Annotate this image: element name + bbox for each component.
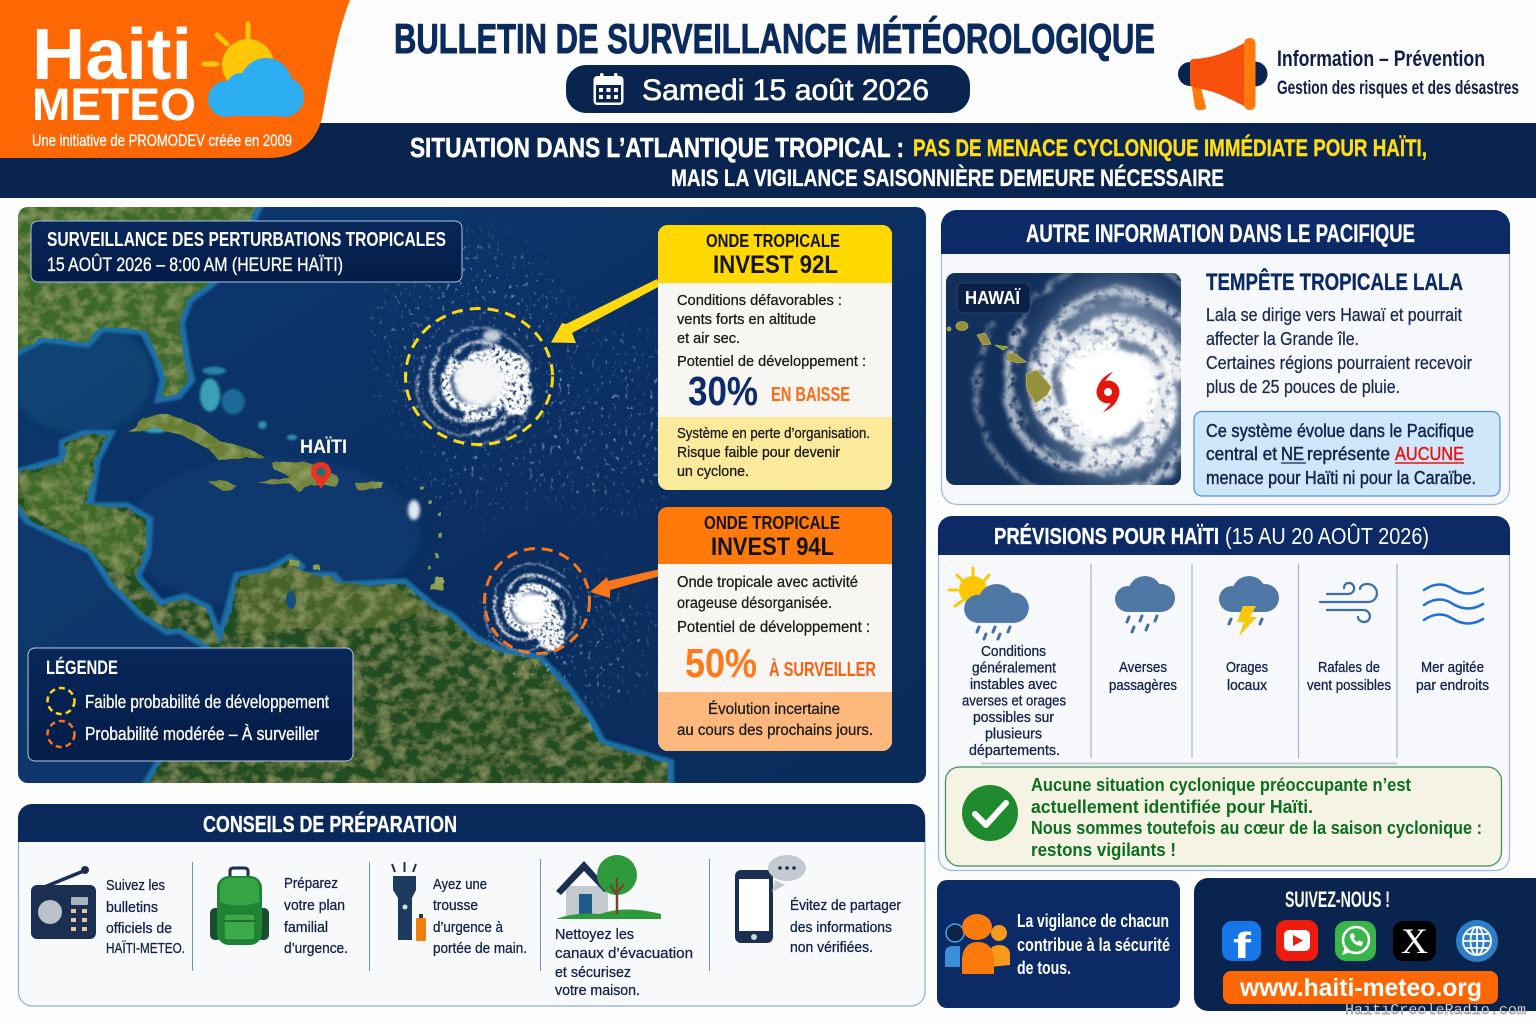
tip: bulletins officiels: HAÏTI-METEO. xyxy=(106,940,185,957)
panel: Invest 92L card: 30% xyxy=(688,368,758,414)
callout: aucune situation préoccupante: Aucune situation cyclonique préoccupante n’est xyxy=(1031,775,1411,795)
date pill: Samedi 15 août 2026 xyxy=(642,74,929,107)
item: conditions générales: généralement xyxy=(972,660,1056,676)
label: Haïti: HAÏTI xyxy=(300,437,347,458)
callout: aucune menace: représente xyxy=(1307,444,1390,464)
logo: Haiti Meteo xyxy=(0,0,350,158)
item: mer agitée xyxy=(1416,660,1489,694)
callout: aucune menace: central et xyxy=(1206,444,1277,464)
icon: sun, cloud and rain xyxy=(949,568,1029,639)
tip: bulletins officiels xyxy=(106,877,185,957)
panel: Invest 92L card: un cyclone. xyxy=(677,464,749,480)
panel: vigilance xyxy=(937,880,1180,1008)
callout: aucune menace: Ce système évolue dans le Pacifique xyxy=(1206,421,1474,441)
icon: X: X xyxy=(1401,921,1428,961)
tip: trousse d'urgence: d’urgence à xyxy=(433,919,504,936)
icon: house and tree xyxy=(556,855,661,919)
tip: plan familial: Préparez xyxy=(284,875,338,892)
title: BULLETIN DE SURVEILLANCE MÉTÉOROLOGIQUE xyxy=(394,15,1155,62)
icon: rain cloud xyxy=(1115,576,1175,632)
icon: YouTube xyxy=(1276,920,1318,961)
panel: Invest 92L card: Système en perte d’organisation. xyxy=(677,426,870,442)
item: averses: passagères xyxy=(1109,678,1177,694)
icon: people xyxy=(945,914,1010,974)
item: orages xyxy=(1226,660,1268,694)
panel: Invest 92L card xyxy=(658,225,892,490)
logo: Haiti Meteo: METEO xyxy=(32,79,196,130)
panel: Invest 92L card: Potentiel de développement : xyxy=(677,353,866,370)
situation headline xyxy=(410,132,1427,192)
label: Hawaï: HAWAÏ xyxy=(965,288,1021,308)
callout: aucune menace: NE xyxy=(1281,444,1304,464)
icon: storm Invest 94L clouds xyxy=(482,562,578,657)
text: description: affecter la Grande île. xyxy=(1206,329,1359,349)
tip: canaux d'évacuation: Nettoyez les xyxy=(555,926,634,943)
tip: bulletins officiels: bulletins xyxy=(106,899,158,916)
callout: aucune menace: menace pour Haïti ni pour la Caraïbe. xyxy=(1206,468,1476,488)
icon: check mark xyxy=(962,785,1018,841)
callout: aucune situation préoccupante: actuellement identifiée pour Haïti. xyxy=(1031,797,1313,817)
tip: plan familial: d’urgence. xyxy=(284,940,348,957)
icon: sun and cloud xyxy=(204,24,304,117)
tip: informations non vérifiées: Évitez de partager xyxy=(790,897,901,914)
panel: Pacifique: AUTRE INFORMATION DANS LE PACIFIQUE xyxy=(1026,220,1415,248)
panel: Invest 92L card: EN BAISSE xyxy=(771,384,850,406)
tip: plan familial: votre plan xyxy=(284,897,345,914)
panel: suivez-nous: SUIVEZ-NOUS ! xyxy=(1285,887,1390,912)
tip: canaux d'évacuation: et sécurisez xyxy=(555,964,631,981)
map: cloud speckles xyxy=(370,220,700,710)
map: coastal glow xyxy=(13,203,668,787)
panel: Invest 94L card: Évolution incertaine xyxy=(708,699,840,718)
callout: aucune situation préoccupante xyxy=(946,767,1502,866)
panel: vigilance: La vigilance de chacun xyxy=(1017,911,1169,931)
item: conditions générales: instables avec xyxy=(970,677,1057,693)
callout: aucune menace xyxy=(1194,412,1500,496)
panel: Invest 92L card: ONDE TROPICALE xyxy=(706,230,840,251)
icon: Facebook xyxy=(1222,921,1261,966)
panel: Invest 92L card: vents forts en altitude xyxy=(677,311,816,328)
panel: Invest 94L card xyxy=(658,507,892,751)
panel: Invest 94L card: Onde tropicale avec activité xyxy=(677,574,858,591)
icon: backpack xyxy=(210,868,269,945)
situation headline: MAIS LA VIGILANCE SAISONNIÈRE DEMEURE NÉCESSAIRE xyxy=(671,164,1224,192)
item: rafales: vent possibles xyxy=(1307,678,1391,694)
satellite image: Hawaï xyxy=(946,273,1181,485)
icon: thunderstorm xyxy=(1219,576,1279,636)
icon: wind xyxy=(1320,583,1377,622)
tip: plan familial: familial xyxy=(284,919,328,936)
watermark: HaitiCreoleRadio.com xyxy=(1345,1002,1526,1019)
item: averses: Averses xyxy=(1119,660,1167,676)
text: description: plus de 25 pouces de pluie. xyxy=(1206,377,1400,397)
item: averses xyxy=(1109,660,1177,694)
panel: vigilance: contribue à la sécurité xyxy=(1017,935,1170,955)
icon: flashlight xyxy=(392,862,426,941)
date pill xyxy=(566,65,970,113)
icon: globe xyxy=(1456,920,1498,962)
header tagline xyxy=(1277,46,1519,99)
panel: Invest 92L card: et air sec. xyxy=(677,330,740,347)
map: small cloud xyxy=(408,500,420,520)
circle: low probability xyxy=(406,308,552,444)
panel: Pacifique xyxy=(933,210,1510,539)
item: mer agitée: par endroits xyxy=(1416,678,1489,694)
circle: moderate probability xyxy=(484,548,590,654)
tip: canaux d'évacuation: votre maison. xyxy=(555,982,640,999)
panel: conseils de préparation: CONSEILS DE PRÉPARATION xyxy=(203,810,457,837)
callout: aucune situation préoccupante: Nous sommes toutefois au cœur de la saison cyclonique : xyxy=(1031,818,1482,838)
panel: map title box: SURVEILLANCE DES PERTURBATIONS TROPICALES xyxy=(47,229,446,251)
panel: Invest 94L card: INVEST 94L xyxy=(711,533,834,561)
text: description xyxy=(1206,305,1472,397)
icon: X xyxy=(1393,921,1436,961)
panel: prévisions: (15 AU 20 AOÛT 2026) xyxy=(1225,522,1429,549)
panel: satellite map xyxy=(8,203,926,787)
item: conditions générales: Conditions xyxy=(981,644,1046,660)
panel: legend: Faible probabilité de développement xyxy=(85,692,329,712)
item: mer agitée: Mer agitée xyxy=(1421,660,1484,676)
item: conditions générales: possibles sur xyxy=(973,710,1054,726)
map: land masses xyxy=(13,203,668,787)
logo: Haiti Meteo: Une initiative de PROMODEV créée en 2009 xyxy=(32,131,292,150)
tip: informations non vérifiées: non vérifiées. xyxy=(790,939,873,956)
callout: aucune menace: AUCUNE xyxy=(1395,444,1464,464)
item: conditions générales: départements. xyxy=(969,743,1060,759)
tip: trousse d'urgence: trousse xyxy=(433,897,478,914)
panel: legend: LÉGENDE xyxy=(46,657,118,679)
panel: Invest 94L card: À SURVEILLER xyxy=(769,658,876,681)
panel: vigilance: de tous. xyxy=(1017,958,1071,978)
panel: Invest 92L card: Conditions défavorables : xyxy=(677,292,842,309)
item: rafales xyxy=(1307,660,1391,694)
tip: plan familial xyxy=(284,875,348,957)
item: conditions générales xyxy=(962,644,1066,759)
panel: map title box: 15 AOÛT 2026 – 8:00 AM (HEURE HAÏTI) xyxy=(47,254,343,276)
icon: calendar xyxy=(594,73,624,105)
panel: Pacifique: TEMPÊTE TROPICALE LALA xyxy=(1206,268,1463,296)
panel: map title box xyxy=(31,221,462,282)
icon: storm Invest 92L clouds xyxy=(414,325,534,448)
map: lake Maracaibo xyxy=(286,591,296,609)
tip: bulletins officiels: officiels de xyxy=(106,920,172,937)
arrow: to Invest 92L xyxy=(551,279,660,343)
label: Hawaï xyxy=(957,283,1030,313)
panel: legend xyxy=(28,648,353,761)
icon: phone and speech bubble xyxy=(735,855,806,943)
icon: megaphone xyxy=(1178,38,1268,110)
tip: canaux d'évacuation: canaux d’évacuation xyxy=(555,945,693,962)
panel: Invest 94L card: Potentiel de développement : xyxy=(677,619,870,636)
tip: trousse d'urgence: Ayez une xyxy=(433,876,487,893)
item: conditions générales: averses et orages xyxy=(962,694,1066,710)
icon: WhatsApp xyxy=(1335,921,1376,961)
panel: prévisions: PRÉVISIONS POUR HAÏTI xyxy=(994,522,1219,549)
icon: Facebook: f xyxy=(1233,925,1252,966)
map: ocean shelves xyxy=(8,320,420,787)
header band xyxy=(0,123,1536,198)
icon: location pin xyxy=(311,462,331,489)
panel: Invest 92L card: INVEST 92L xyxy=(713,251,838,279)
icon: radio xyxy=(31,866,96,939)
callout: aucune situation préoccupante: restons vigilants ! xyxy=(1031,840,1176,860)
panel: conseils de préparation xyxy=(18,804,925,1006)
situation headline: SITUATION DANS L’ATLANTIQUE TROPICAL : xyxy=(410,132,904,163)
icon: waves xyxy=(1424,585,1483,624)
panel: Invest 94L card: orageuse désorganisée. xyxy=(677,595,832,612)
item: orages: Orages xyxy=(1226,660,1268,676)
tip: informations non vérifiées: des informations xyxy=(790,919,892,936)
panel: Invest 92L card: Risque faible pour devenir xyxy=(677,445,840,461)
panel: suivez-nous xyxy=(1194,878,1536,1011)
website button: www.haiti-meteo.org xyxy=(1239,974,1482,1002)
item: conditions générales: plusieurs xyxy=(985,726,1042,742)
icon: hurricane symbol xyxy=(1096,372,1120,412)
tip: canaux d'évacuation xyxy=(555,926,693,999)
panel: legend: Probabilité modérée – À surveiller xyxy=(85,724,319,744)
text: description: Certaines régions pourraient recevoir xyxy=(1206,353,1472,373)
text: description: Lala se dirige vers Hawaï et pourrait xyxy=(1206,305,1462,325)
panel: Invest 94L card: au cours des prochains jours. xyxy=(677,722,873,739)
panel: Invest 94L card: 50% xyxy=(685,640,757,686)
tip: trousse d'urgence: portée de main. xyxy=(433,940,527,957)
panel: Invest 94L card: ONDE TROPICALE xyxy=(704,512,840,533)
panel: prévisions xyxy=(938,516,1510,870)
tip: trousse d'urgence xyxy=(433,876,527,957)
item: orages: locaux xyxy=(1227,678,1268,694)
tip: informations non vérifiées xyxy=(790,897,901,956)
arrow: to Invest 94L xyxy=(590,569,660,598)
item: rafales: Rafales de xyxy=(1318,660,1380,676)
logo: Haiti Meteo: Haiti xyxy=(32,15,192,95)
tip: bulletins officiels: Suivez les xyxy=(106,877,165,894)
header tagline: Information – Prévention xyxy=(1277,46,1485,71)
